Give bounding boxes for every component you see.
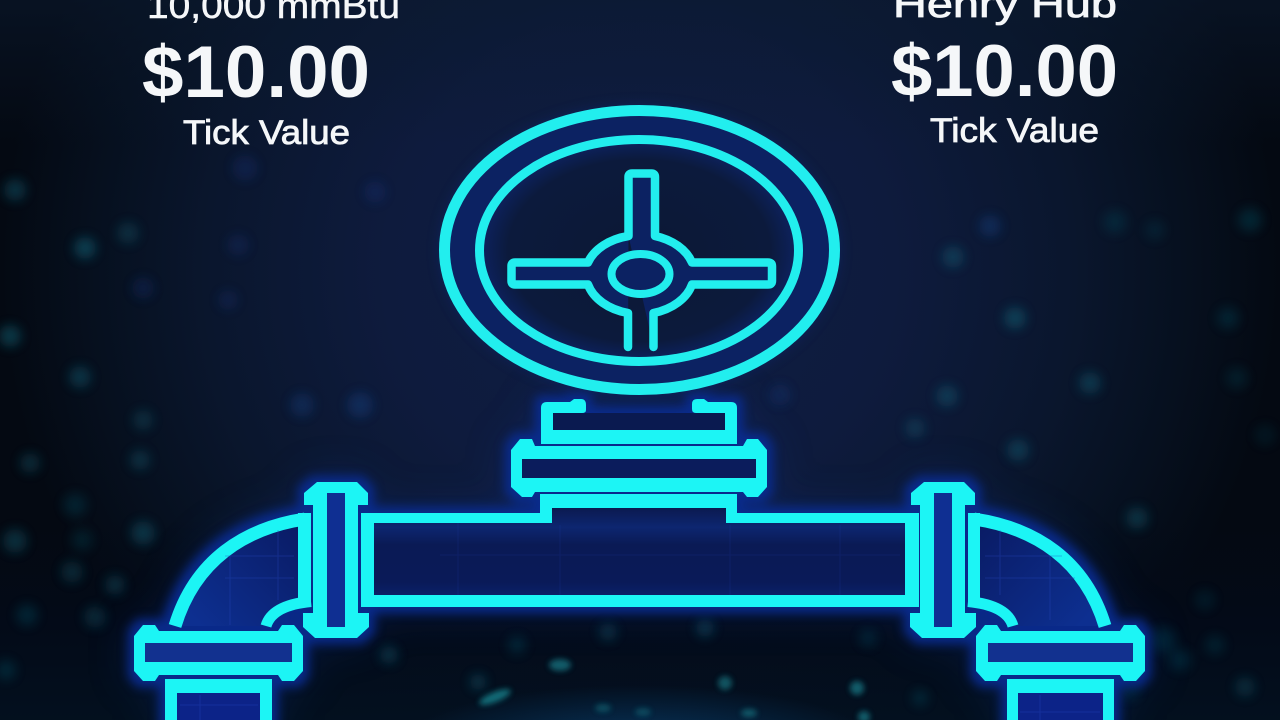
- background: glowing particles: [0, 155, 1276, 720]
- value: right tick value: $10.00: [891, 31, 1118, 112]
- wheel spokes and hub: [512, 174, 772, 347]
- left vertical flange: [303, 482, 369, 638]
- right lower pipe: [1007, 679, 1114, 720]
- icon: glowing pipeline assembly: [134, 399, 1145, 720]
- wheel inner ring: [480, 140, 798, 362]
- caption: right tick value: Tick Value: [930, 112, 1099, 150]
- valve stem bracket: [541, 399, 737, 444]
- wheel centre eye: [612, 254, 670, 294]
- right elbow: [968, 513, 1105, 626]
- right vertical flange: [910, 482, 976, 638]
- wheel outer ring: [444, 110, 834, 390]
- left lower pipe: [165, 679, 272, 720]
- left lower flange: [134, 625, 303, 681]
- icon: valve handwheel: [444, 110, 834, 390]
- caption: left tick value: Tick Value: [183, 114, 350, 152]
- right lower flange: [976, 625, 1145, 681]
- left elbow: [175, 513, 311, 626]
- valve flange: [511, 439, 767, 497]
- main horizontal pipe: [361, 494, 919, 607]
- value: left tick value: $10.00: [142, 32, 370, 113]
